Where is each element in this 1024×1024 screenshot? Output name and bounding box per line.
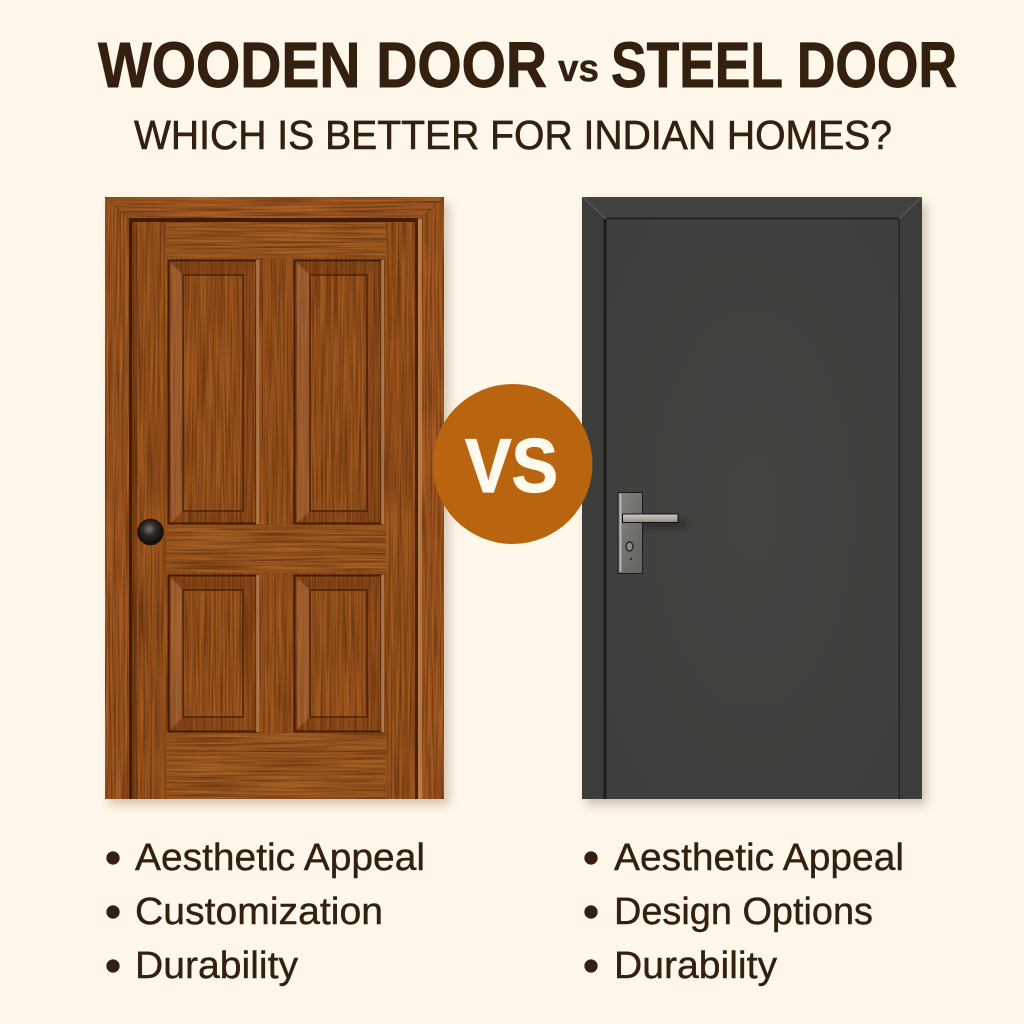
icon: door knob bbox=[138, 520, 163, 544]
panel: bottom right bbox=[294, 575, 384, 732]
door frame bbox=[105, 197, 444, 799]
title: vs bbox=[558, 48, 599, 90]
steel door bbox=[582, 197, 926, 805]
title: WOODEN DOOR bbox=[98, 29, 547, 101]
icon: door handle bbox=[618, 492, 686, 574]
list: wooden door features: Durability bbox=[135, 945, 298, 987]
panel: top left bbox=[168, 260, 259, 524]
list: wooden door features bbox=[106, 837, 425, 987]
panel: top right bbox=[294, 260, 384, 524]
list: steel door features: Design Options bbox=[614, 891, 873, 933]
subtitle: WHICH IS BETTER FOR INDIAN HOMES? bbox=[134, 112, 892, 158]
VS badge: VS bbox=[465, 424, 558, 509]
list: wooden door features: Customization bbox=[135, 891, 383, 933]
VS badge bbox=[432, 384, 592, 544]
steel frame bbox=[582, 197, 922, 799]
steel leaf bbox=[604, 218, 900, 799]
list: steel door features: Durability bbox=[614, 945, 777, 987]
list: wooden door features: Aesthetic Appeal bbox=[135, 837, 425, 879]
title bbox=[98, 29, 957, 101]
panel: bottom left bbox=[168, 575, 259, 732]
door leaf bbox=[129, 218, 418, 799]
list: steel door features: Aesthetic Appeal bbox=[614, 837, 904, 879]
wooden door bbox=[105, 197, 449, 805]
list: steel door features bbox=[584, 837, 904, 987]
title: STEEL DOOR bbox=[611, 29, 957, 101]
